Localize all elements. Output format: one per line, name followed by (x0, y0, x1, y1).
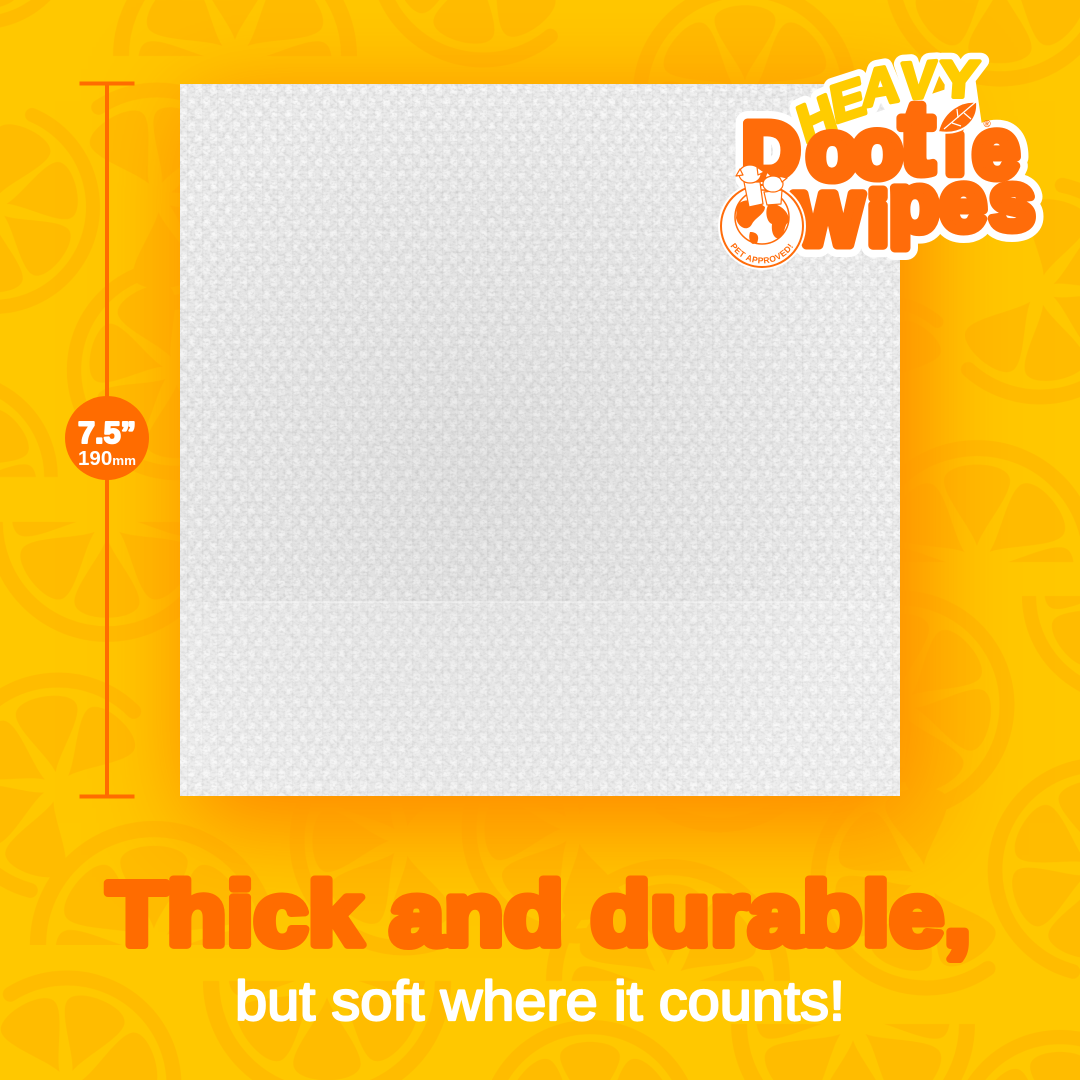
subheading: but soft where it counts! (235, 969, 845, 1032)
icon: leaf (938, 100, 978, 133)
measurement scale: 190mm (78, 448, 136, 470)
logo white backing (742, 50, 1035, 262)
icon: globe (735, 190, 789, 244)
pet approved badge (718, 166, 806, 270)
HEAVY wordmark (791, 50, 981, 155)
measurement scale: 7.5” (78, 415, 136, 450)
Dootie wordmark (742, 80, 1019, 197)
wipe drop shadow (180, 84, 900, 796)
registered mark: ® (983, 119, 991, 130)
icon: dog and cat (736, 165, 787, 207)
pet approved badge: PET APPROVED! (730, 242, 793, 264)
heading: Thick and durable: Thick and durable, (107, 865, 971, 965)
Wipes wordmark (793, 154, 1035, 262)
textured white wipe (180, 84, 900, 796)
